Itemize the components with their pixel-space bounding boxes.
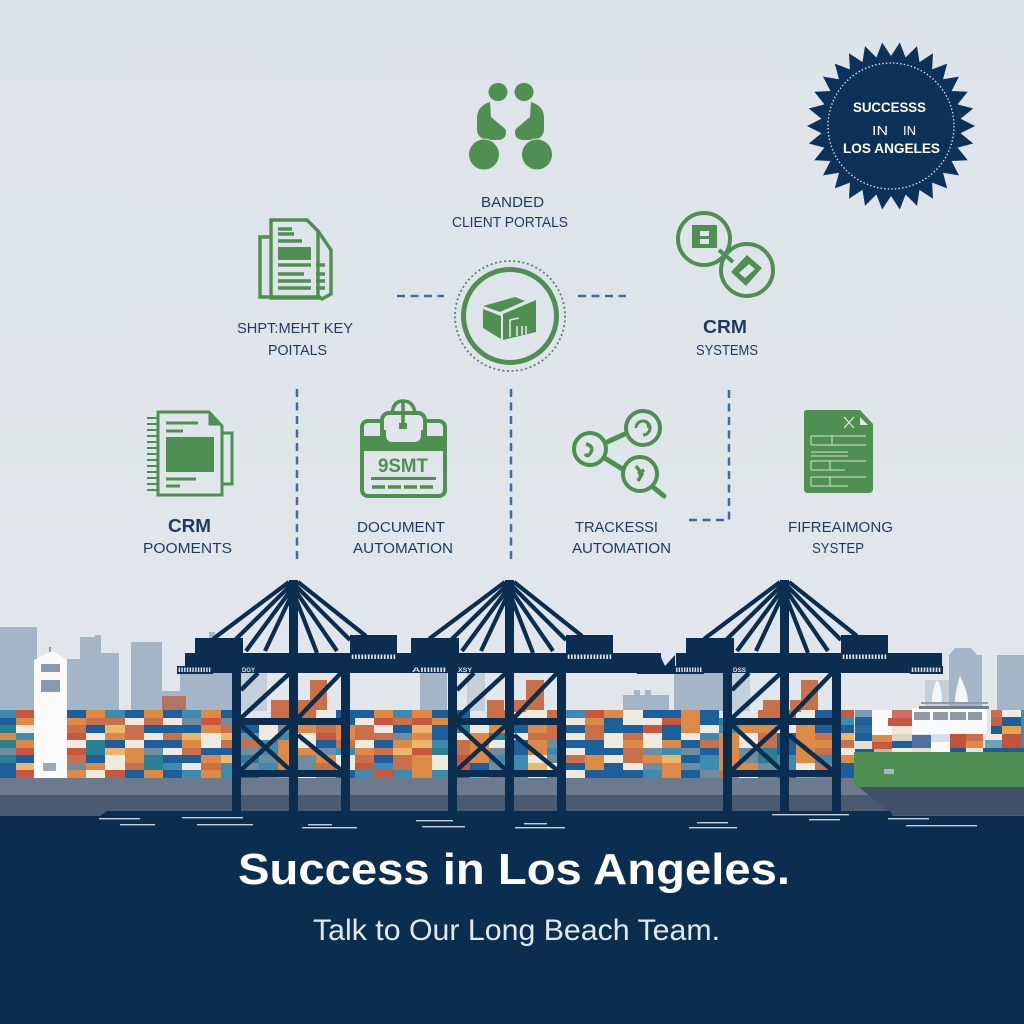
icon: document automation bag: 9SMT bbox=[378, 456, 428, 477]
label: firewall system bbox=[788, 519, 893, 557]
label: firewall system: FIFREAIMONG bbox=[788, 519, 893, 536]
icon: people bbox=[468, 83, 552, 170]
badge: SUCCESSS bbox=[853, 99, 926, 115]
label: document automation: DOCUMENT bbox=[357, 519, 445, 536]
icon: central package bbox=[455, 261, 565, 371]
harbour water bbox=[0, 811, 1024, 1024]
label: document automation: AUTOMATION bbox=[353, 540, 453, 557]
icon: tracking network bbox=[574, 411, 664, 496]
label: CRM poocments bbox=[143, 516, 232, 557]
container ship bbox=[854, 675, 1024, 815]
crane 3: IIIIIIIIII bbox=[911, 668, 942, 674]
title: Success in Los Angeles. bbox=[238, 845, 790, 894]
label: CRM poocments: CRM bbox=[168, 516, 211, 536]
crane 1: IIIIIIIIIIIIII bbox=[351, 655, 397, 661]
crane 3: IIIIIIIIIIII bbox=[670, 668, 703, 674]
icon: CRM documents bbox=[147, 412, 232, 495]
label: tracking automation: TRACKESSI bbox=[575, 519, 658, 536]
label: firewall system: SYSTEP bbox=[812, 540, 864, 557]
label: CRM systems: CRM bbox=[703, 317, 747, 337]
dashed connectors bbox=[297, 296, 729, 560]
badge: IN bbox=[872, 123, 888, 138]
crane 2: AIIIIIIII bbox=[412, 668, 447, 674]
label: banded client portals: BANDED bbox=[481, 194, 544, 211]
icon: shipment documents bbox=[260, 220, 331, 299]
icon: CRM systems bbox=[678, 213, 773, 296]
label: shipment key portals: SHPT:MEHT KEY bbox=[237, 320, 353, 337]
label: shipment key portals bbox=[237, 320, 353, 359]
crane 1: IIIIIIIIIIII bbox=[178, 668, 212, 674]
label: banded client portals bbox=[452, 194, 568, 231]
crane gantry link bbox=[637, 655, 675, 674]
crane 2: XSY bbox=[458, 668, 472, 674]
crane 3 bbox=[668, 580, 943, 811]
label: tracking automation: AUTOMATION bbox=[572, 540, 671, 557]
white harbour tower bbox=[34, 647, 67, 778]
label: shipment key portals: POITALS bbox=[268, 342, 327, 359]
crane 1 bbox=[177, 580, 420, 811]
icon: document automation bag bbox=[362, 401, 445, 496]
raised containers behind cranes bbox=[271, 680, 818, 718]
label: CRM poocments: POOMENTS bbox=[143, 540, 232, 557]
crane 1: DGY bbox=[242, 668, 255, 674]
badge: IN bbox=[903, 123, 916, 138]
label: CRM systems: SYSTEMS bbox=[696, 342, 758, 359]
label: tracking automation bbox=[572, 519, 671, 557]
label: banded client portals: CLIENT PORTALS bbox=[452, 214, 568, 231]
crane 2 bbox=[401, 580, 661, 811]
container stacks bbox=[0, 710, 854, 778]
quay bbox=[0, 778, 1024, 816]
badge bbox=[807, 42, 975, 210]
crane 3: IIIIIIIIIIIIII bbox=[842, 655, 888, 661]
label: document automation bbox=[353, 519, 453, 557]
subtitle: Talk to Our Long Beach Team. bbox=[313, 914, 720, 947]
label: CRM systems bbox=[696, 317, 758, 359]
icon: spreadsheet bbox=[804, 410, 873, 493]
badge: LOS ANGELES bbox=[843, 140, 940, 156]
crane 3: DSS bbox=[733, 668, 746, 674]
crane 2: IIIIIIIIIIIIII bbox=[567, 655, 613, 661]
